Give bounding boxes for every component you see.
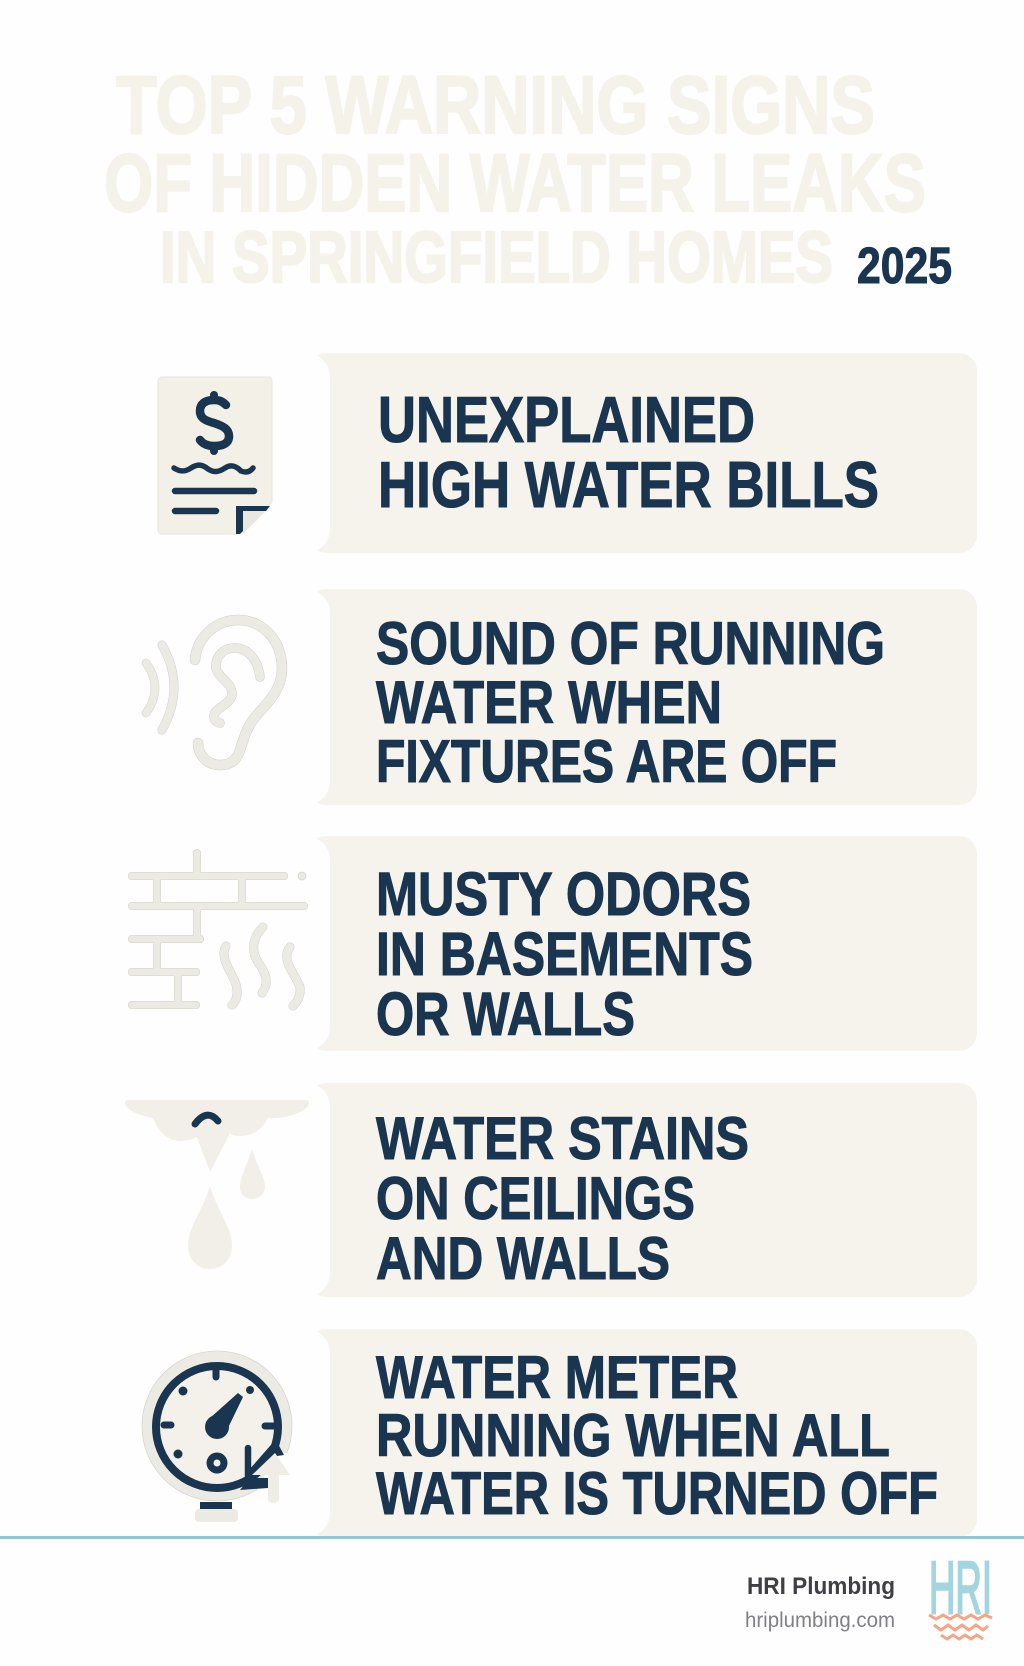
panel 4 text bbox=[376, 1104, 749, 1292]
panel 1 text: HIGH WATER BILLS bbox=[378, 449, 879, 521]
panel 3 text: OR WALLS bbox=[376, 980, 635, 1049]
panel: sound of running water bbox=[270, 589, 977, 805]
panel: musty odors bbox=[270, 836, 977, 1051]
panel: water stains bbox=[270, 1083, 977, 1297]
panel 5 text: WATER METER bbox=[376, 1343, 738, 1411]
panel 5 text: RUNNING WHEN ALL bbox=[376, 1401, 890, 1469]
panel: unexplained high water bills bbox=[270, 353, 977, 553]
icon: water bill bbox=[158, 377, 272, 534]
panel 4 text: ON CEILINGS bbox=[376, 1164, 695, 1232]
icon: water meter gauge bbox=[142, 1351, 302, 1522]
icon: brick wall with odor lines bbox=[132, 853, 306, 1006]
panel 3 text: MUSTY ODORS bbox=[376, 860, 751, 929]
panel 3 text: IN BASEMENTS bbox=[376, 920, 753, 989]
panel 1 text: UNEXPLAINED bbox=[378, 384, 755, 456]
year label: 2025 bbox=[857, 237, 952, 294]
panel 1 text bbox=[378, 384, 879, 521]
footer brand name: HRI Plumbing bbox=[747, 1573, 895, 1600]
footer website: hriplumbing.com bbox=[745, 1609, 895, 1632]
panel: water meter running bbox=[270, 1329, 977, 1537]
panel 5 text bbox=[376, 1343, 938, 1527]
panel 2 text: WATER WHEN bbox=[376, 668, 722, 736]
panel 2 text: SOUND OF RUNNING bbox=[376, 609, 885, 677]
panel 3 text bbox=[376, 860, 753, 1049]
icon: ceiling stain and drops bbox=[125, 1100, 309, 1269]
logo: HRI with waves bbox=[929, 1546, 992, 1639]
title: IN SPRINGFIELD HOMES bbox=[160, 218, 833, 298]
footer divider bbox=[0, 1536, 1024, 1539]
title: TOP 5 WARNING SIGNS bbox=[116, 60, 875, 151]
icon: ear with sound waves bbox=[146, 620, 282, 765]
panel 2 text: FIXTURES ARE OFF bbox=[376, 727, 837, 795]
title bbox=[104, 60, 926, 298]
panel 2 text bbox=[376, 609, 885, 795]
panel 4 text: WATER STAINS bbox=[376, 1104, 749, 1172]
panel 4 text: AND WALLS bbox=[376, 1224, 670, 1292]
